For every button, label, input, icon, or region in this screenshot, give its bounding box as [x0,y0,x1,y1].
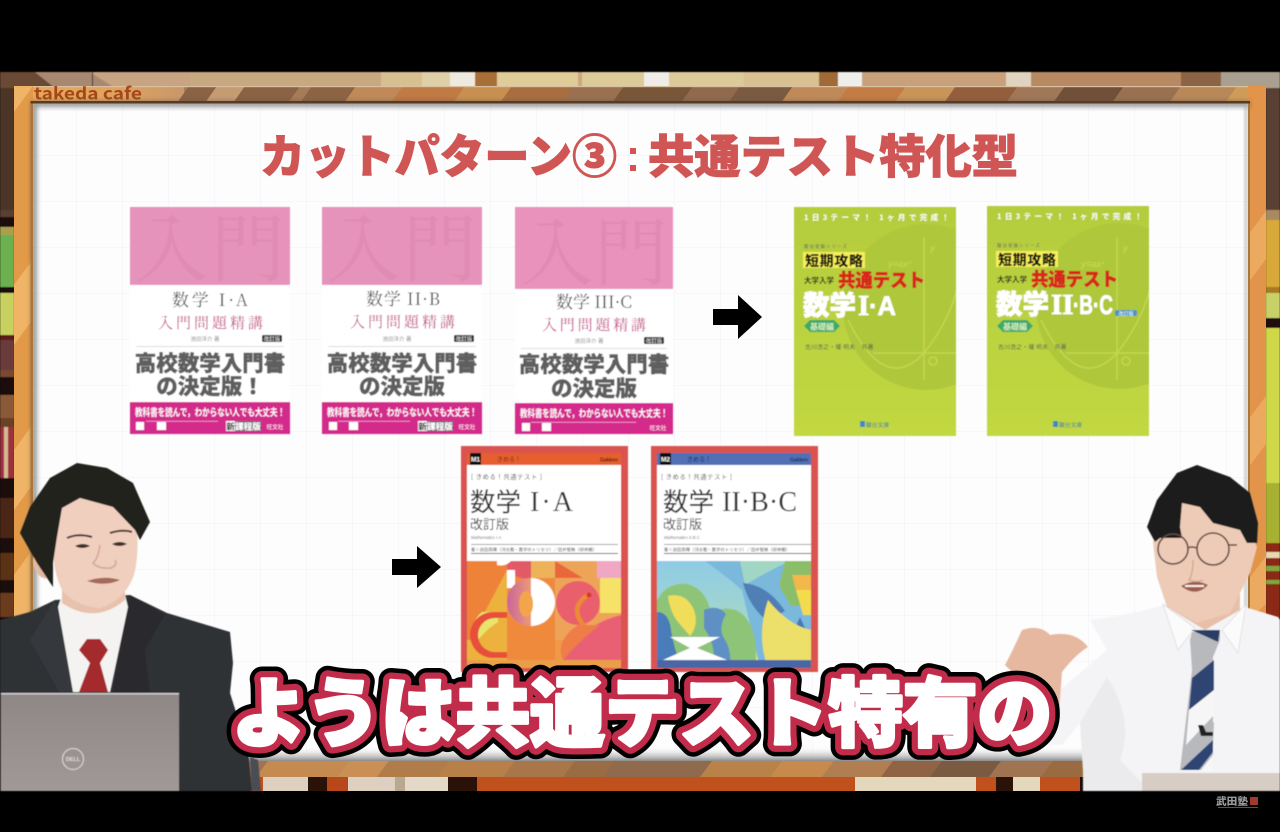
face [53,497,138,608]
book: 数学II・B 入門問題精講: 池田洋介 著 [382,335,412,343]
book: きめる！共通テスト 数学I・A: M1 [471,456,480,464]
book: 短期攻略 共通テスト 数学I・A: y=ax² [887,259,912,269]
ear [30,549,56,581]
book: 短期攻略 共通テスト 数学I・A: 共通テスト [838,267,925,293]
face [1153,500,1257,623]
book: 短期攻略 共通テスト 数学II・B・C: 吉川浩之・榎 明夫 共著 [998,342,1067,351]
book: 数学II・B 入門問題精講: 入門問題精講 [350,311,455,332]
book: 数学I・A 入門問題精講: 教科書を読んで，わからない人でも大丈夫！ [135,404,285,419]
caption: ようは共通テスト特有の [232,653,1052,762]
arrow: upper [713,295,762,339]
book: きめる！共通テスト 数学II・B・C: II·B·C [722,487,797,518]
book: 数学I・A 入門問題精講: 改訂版 [264,335,281,343]
neck [62,580,125,613]
title [260,121,1018,187]
right presenter [1005,465,1280,791]
book: 短期攻略 共通テスト 数学II・B・C: 駿台文庫 [1059,420,1082,429]
book: きめる！共通テスト 数学II・B・C: Mathematics II·B·C [664,535,701,540]
book: きめる！共通テスト 数学I・A: きめる！ [497,454,521,464]
book: 短期攻略 共通テスト 数学II・B・C: y=ax² [1080,259,1105,269]
channel watermark: 武田塾 [1216,793,1248,808]
book: 数学I・A 入門問題精講: 新 [226,420,235,432]
book: きめる！共通テスト 数学II・B・C: きめる！ [687,454,711,464]
book: 短期攻略 共通テスト 数学II・B・C: II [1051,289,1074,321]
book: きめる！共通テスト 数学I・A: [ きめる！共通テスト ] [471,472,543,481]
whiteboard panel [30,101,1250,763]
book: 数学I・A 入門問題精講: 数学 I·A [172,286,249,311]
book: きめる！共通テスト 数学II・B・C: M2 [661,456,670,464]
book: きめる！共通テスト 数学I・A: 著＝迫田昂輝（河合塾・数学のトリセツ）／田井智暁（研伸館） [471,546,597,553]
book: 数学III・C 入門問題精講: 旺文社 [650,424,667,432]
book: きめる！共通テスト 数学II・B・C: 数学 [663,482,714,519]
tie [1180,632,1220,770]
neck [1170,590,1240,630]
book: 数学II・B 入門問題精講: 入門 [327,191,477,297]
laptop [1,693,179,791]
book: 短期攻略 共通テスト 数学II・B・C: 駿台受験シリーズ [997,242,1041,249]
glasses [1158,533,1237,565]
book: 数学III・C 入門問題精講: 教科書を読んで，わからない人でも大丈夫！ [520,405,668,420]
shirt [58,595,128,692]
book: 短期攻略 共通テスト 数学I・A: 大学入学 [804,275,834,286]
book: 数学I・A 入門問題精講: 高校数学入門書 [135,347,285,378]
book: 短期攻略 共通テスト 数学II・B・C: 数学 [996,283,1049,322]
hair [1147,465,1258,543]
book: 数学II・B 入門問題精講: 旺文社 [459,423,476,431]
book: 数学III・C 入門問題精講: 池田洋介 著 [574,337,604,345]
book: 数学I・A 入門問題精講: 入門 [135,191,285,297]
book: 短期攻略 共通テスト 数学II・B・C: 共通テスト [1031,266,1118,292]
book: 数学III・C 入門問題精講: 入門問題精講 [542,314,646,335]
book: 短期攻略 共通テスト 数学I・A: I [858,290,869,322]
book: きめる！共通テスト 数学II・B・C: [ きめる！共通テスト ] [661,472,733,481]
book: 数学I・A 入門問題精講: 入門問題精講 [158,312,263,333]
book: 短期攻略 共通テスト 数学I・A: 数学 [803,284,856,323]
book: 数学III・C 入門問題精講: 高校数学入門書 [519,348,669,379]
left presenter: DELL [66,757,81,763]
book: 短期攻略 共通テスト 数学II・B・C: 大学入学 [997,274,1027,285]
book: きめる！共通テスト 数学I・A: Gakken [600,458,618,464]
hand [1005,628,1088,722]
book: 数学I・A 入門問題精講: の決定版！ [156,370,264,401]
book: きめる！共通テスト 数学I・A: I·A [530,487,574,518]
mouth [1181,582,1208,592]
book: 短期攻略 共通テスト 数学II・B・C: 改訂版 [1118,310,1134,318]
book: 数学II・B 入門問題精講: 新 [418,420,427,432]
left presenter [0,463,261,791]
book: 短期攻略 共通テスト 数学II・B・C [986,205,1150,437]
book: 数学I・A 入門問題精講: 池田洋介 著 [190,335,220,343]
arrow: lower [392,546,441,588]
book: 短期攻略 共通テスト 数学II・B・C: 1日3テーマ！ 1ヶ月で完成！ [997,211,1142,222]
book: 短期攻略 共通テスト 数学I・A: 駿台文庫 [866,420,889,429]
bottom row of books under frame [250,777,1080,791]
chair [250,757,261,791]
title: カットパターン③ [260,121,617,187]
book: きめる！共通テスト 数学I・A [461,446,628,672]
takeda cafe logo: takeda cafe [34,80,142,104]
book: 短期攻略 共通テスト 数学I・A: 短期攻略 [805,251,863,271]
book: 短期攻略 共通テスト 数学II・B・C: y [1122,243,1129,253]
book: 数学I・A 入門問題精講: 旺文社 [267,423,284,431]
microphone [1198,725,1213,736]
book: 数学II・B 入門問題精講 [322,191,482,434]
book: 数学II・B 入門問題精講: 改訂版 [456,335,473,343]
shirt [1043,605,1280,791]
suit [0,595,252,791]
book: 数学II・B 入門問題精講: 数学 II·B [366,285,440,310]
eyes, brows and mouth [67,531,132,538]
book: 数学II・B 入門問題精講: 高校数学入門書 [327,347,477,378]
book: 短期攻略 共通テスト 数学I・A [793,206,957,437]
book: きめる！共通テスト 数学I・A: 数学 [470,482,521,519]
book: 数学III・C 入門問題精講 [515,195,673,434]
laptop [1142,773,1280,791]
book: きめる！共通テスト 数学II・B・C: Gakken [790,458,808,464]
book: きめる！共通テスト 数学I・A: 改訂版 [470,514,509,533]
book: 短期攻略 共通テスト 数学I・A: 基礎編 [810,322,834,332]
caption: ようは共通テスト特有の [232,653,1052,762]
book: 短期攻略 共通テスト 数学I・A: 駿台受験シリーズ [804,243,848,250]
book: 短期攻略 共通テスト 数学I・A: y [929,243,936,253]
book: 数学II・B 入門問題精講: の決定版 [359,370,445,401]
collar [1163,604,1246,653]
book: きめる！共通テスト 数学II・B・C: 改訂版 [663,514,702,533]
title: 共通テスト特化型 [648,121,1018,187]
book: きめる！共通テスト 数学II・B・C: 著＝迫田昂輝（河合塾・数学のトリセツ）／田井智暁（研伸館） [664,546,790,553]
caption: ようは共通テスト特有の [232,653,1052,762]
book: 短期攻略 共通テスト 数学I・A: 1日3テーマ！ 1ヶ月で完成！ [804,212,949,223]
book: 短期攻略 共通テスト 数学II・B・C: 短期攻略 [998,250,1056,270]
book: 数学I・A 入門問題精講 [130,191,290,434]
tie [79,639,108,692]
book: 数学III・C 入門問題精講: の決定版 [551,372,637,403]
book: 短期攻略 共通テスト 数学I・A: ·A [869,291,896,321]
book: 数学III・C 入門問題精講: 数学 III·C [556,288,632,313]
hair [20,463,150,587]
book: きめる！共通テスト 数学II・B・C [651,446,818,672]
book: 短期攻略 共通テスト 数学II・B・C: 基礎編 [1003,322,1027,332]
book: 短期攻略 共通テスト 数学II・B・C: ·B·C [1073,290,1113,320]
book: 数学III・C 入門問題精講: 入門 [520,195,668,301]
book: 数学II・B 入門問題精講: 教科書を読んで，わからない人でも大丈夫！ [327,404,477,419]
book: 短期攻略 共通テスト 数学I・A: 吉川浩之・榎 明夫 共著 [805,342,874,351]
book: 数学III・C 入門問題精講: 改訂版 [646,337,663,345]
book: 数学II・B 入門問題精講: 課程版 [427,420,453,432]
book: 数学I・A 入門問題精講: 課程版 [235,420,261,432]
book: きめる！共通テスト 数学I・A: Mathematics I·A [471,535,501,540]
